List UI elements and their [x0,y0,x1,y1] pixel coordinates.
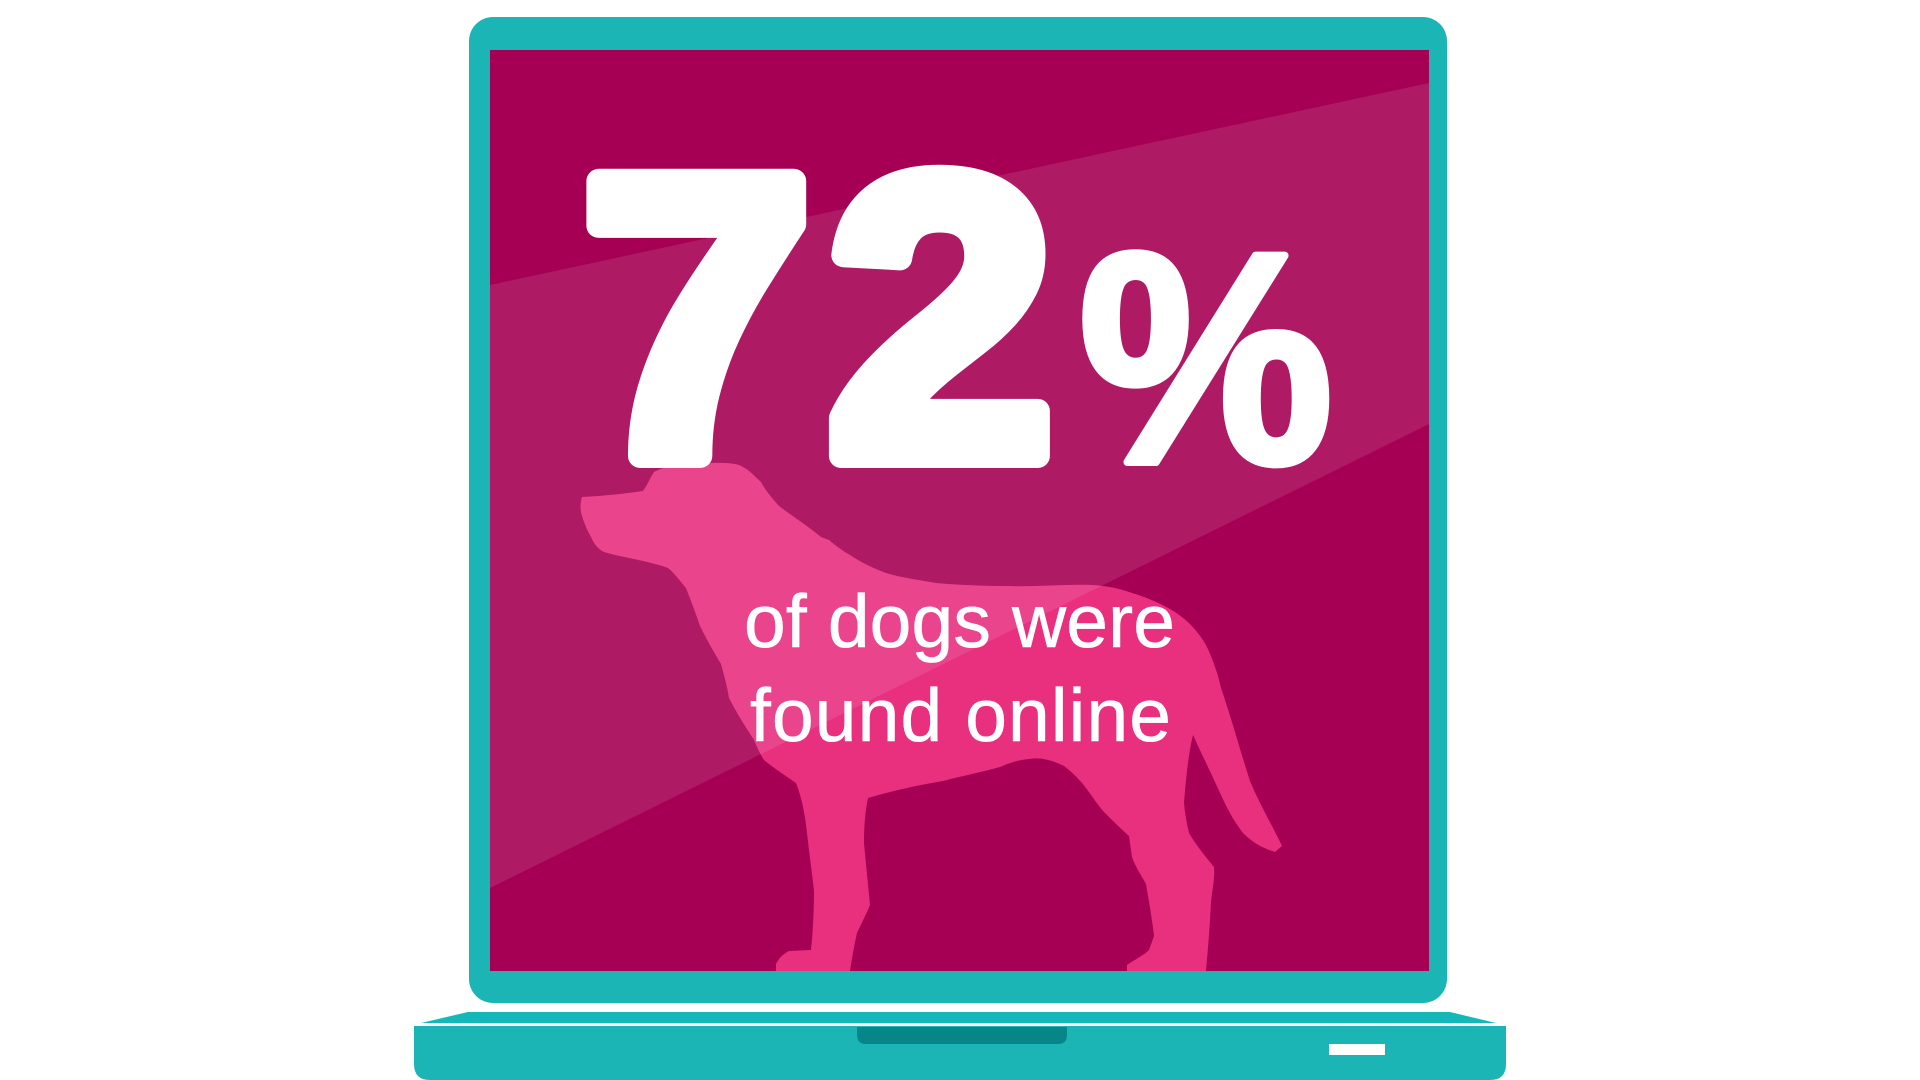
laptop lid [469,17,1447,1003]
hinge top of base [421,1012,1496,1023]
laptop screen [490,50,1429,971]
indicator light [1329,1044,1385,1055]
base body [414,1026,1506,1080]
caption: of dogs were found online: of dogs were [744,579,1175,663]
dog silhouette [580,463,1282,971]
caption: of dogs were found online: found online [750,673,1171,757]
big number 72% [581,94,1333,541]
diagonal screen light band [490,83,1429,888]
big number 72%: % [1079,190,1333,526]
laptop base [414,1012,1506,1080]
big number 72%: 2 [827,94,1054,541]
big number 72%: 7 [581,94,812,541]
caption: of dogs were found online [744,579,1175,757]
trackpad notch [857,1027,1067,1044]
